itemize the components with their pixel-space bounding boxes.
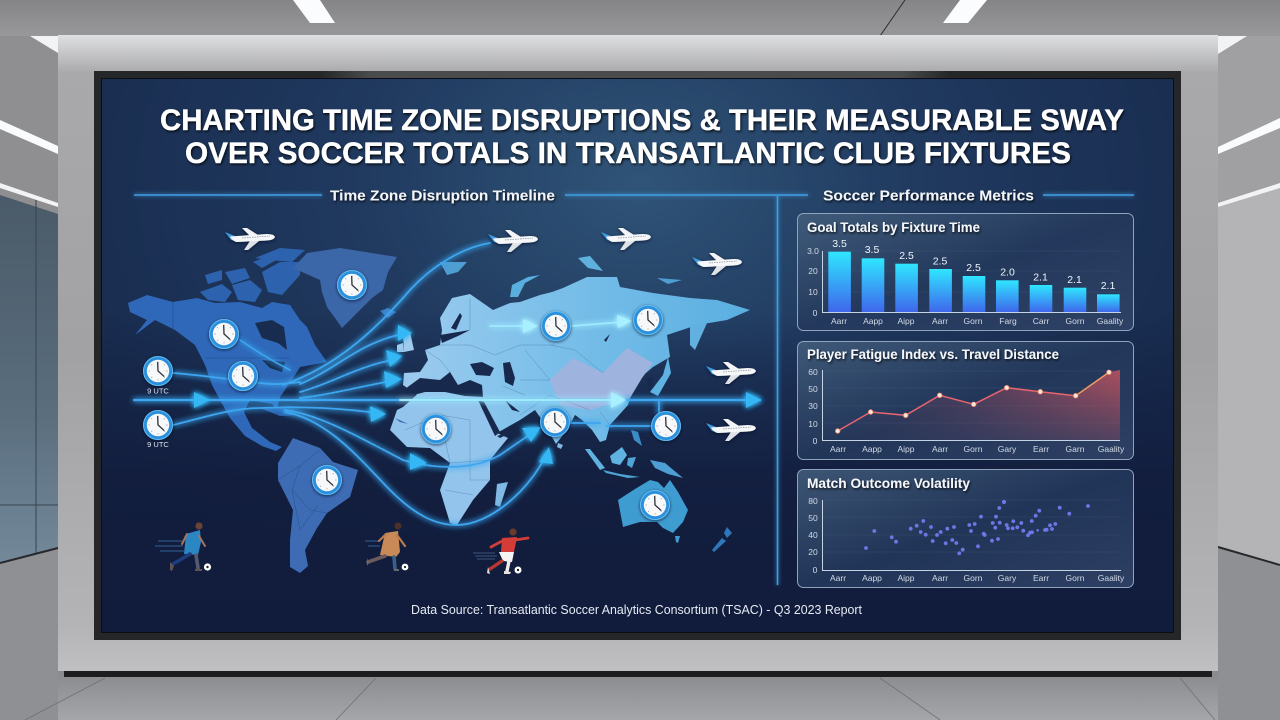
panel: goal totals bar chart xyxy=(798,214,1134,330)
continent: eurasia xyxy=(397,256,750,444)
clock labels: 9 UTC xyxy=(147,440,169,449)
data source footer: Data Source: Transatlantic Soccer Analytics Consortium (TSAC) - Q3 2023 Report xyxy=(411,602,862,617)
fatigue area xyxy=(868,370,1120,440)
fatigue axis labels: 60 xyxy=(808,367,818,377)
panel heading: Player Fatigue Index vs. Travel Distance xyxy=(807,347,1059,362)
country borders xyxy=(405,298,612,495)
fatigue axis labels: Aipp xyxy=(897,444,915,454)
bar axis labels: 20 xyxy=(808,266,818,276)
bar axis labels: Aapp xyxy=(863,316,883,326)
panel: volatility scatter chart xyxy=(798,470,1134,588)
bar values: 2.5 xyxy=(899,250,914,262)
bar axis labels: Farg xyxy=(999,316,1017,326)
bar values: 3.5 xyxy=(832,238,847,250)
scatter axis labels: 40 xyxy=(808,530,818,540)
seas and lakes xyxy=(405,313,653,438)
fatigue line end segment xyxy=(1076,372,1109,396)
bar values: 2.1 xyxy=(1101,280,1115,292)
continent: greenland xyxy=(293,248,397,328)
clock labels xyxy=(147,386,169,449)
scatter points xyxy=(864,500,1090,555)
clocks xyxy=(144,270,680,520)
continent: africa xyxy=(390,392,563,525)
bar axis labels: Aarr xyxy=(831,316,847,326)
scatter axis labels xyxy=(808,496,1125,583)
bar values: 2.1 xyxy=(1033,272,1048,284)
bar axis labels: 10 xyxy=(808,287,818,297)
fatigue axis labels: Aapp xyxy=(862,444,882,454)
arrowheads xyxy=(194,315,761,470)
fatigue axis labels: Gary xyxy=(998,444,1017,454)
title: CHARTING TIME ZONE DISRUPTIONS & THEIR MEASURABLE SWAY xyxy=(160,104,1124,137)
section header: timeline: Time Zone Disruption Timeline xyxy=(330,188,555,204)
scatter axis labels: Aipp xyxy=(897,573,915,583)
airplanes xyxy=(225,228,756,441)
scatter axis labels: Gorn xyxy=(964,573,983,583)
fatigue axis labels: Gorn xyxy=(964,444,983,454)
fatigue axis labels: Garn xyxy=(1066,444,1085,454)
continent: south america xyxy=(278,438,358,573)
fatigue line xyxy=(838,388,1076,431)
scatter axis labels: Aarr xyxy=(830,573,846,583)
world map xyxy=(128,248,750,573)
scatter axis labels: 0 xyxy=(813,565,818,575)
section header: metrics: Soccer Performance Metrics xyxy=(823,188,1034,204)
bar values: 2.1 xyxy=(1067,274,1082,286)
player: red xyxy=(473,528,528,574)
fatigue points xyxy=(835,370,1111,433)
bar axis labels: Aipp xyxy=(897,316,915,326)
bar axis labels: Gorn xyxy=(964,316,983,326)
column divider xyxy=(776,196,778,585)
panel: fatigue line chart xyxy=(798,342,1134,460)
panel heading: Goal Totals by Fixture Time xyxy=(807,220,980,235)
bars xyxy=(828,252,1120,312)
fatigue axis labels: Aarr xyxy=(830,444,846,454)
continent: north america xyxy=(128,248,327,451)
bar axis labels xyxy=(807,246,1124,326)
scatter axis labels: Aapp xyxy=(862,573,882,583)
continent: australia and islands xyxy=(395,418,732,552)
fatigue axis labels xyxy=(808,367,1125,454)
route arrows xyxy=(134,243,761,525)
bar values: 2.5 xyxy=(933,256,947,268)
scatter axis labels: 20 xyxy=(808,547,818,557)
panel heading: Match Outcome Volatility xyxy=(807,476,970,491)
scatter axis labels: Aarr xyxy=(932,573,948,583)
screen background xyxy=(102,79,1173,632)
bar values: 2.0 xyxy=(1000,266,1015,278)
player: blue xyxy=(155,522,211,571)
clock labels: 9 UTC xyxy=(147,386,169,396)
player: orange xyxy=(365,522,408,571)
bar values: 3.5 xyxy=(865,244,879,256)
fatigue axis labels: 50 xyxy=(808,384,818,394)
bar axis labels: Gorn xyxy=(1066,316,1085,326)
bar axis labels: Aarr xyxy=(932,316,948,326)
bar values: 2.5 xyxy=(966,262,981,274)
fatigue axis labels: 10 xyxy=(808,419,818,429)
bar axis labels: 0 xyxy=(813,308,818,318)
fatigue axis labels: 0 xyxy=(813,436,818,446)
title: OVER SOCCER TOTALS IN TRANSATLANTIC CLUB FIXTURES xyxy=(185,137,1071,170)
scatter axis labels: Earr xyxy=(1033,573,1049,583)
bar values xyxy=(832,238,1115,292)
bar axis labels: 3.0 xyxy=(807,246,819,256)
bar axis labels: Carr xyxy=(1033,316,1049,326)
fatigue axis labels: Gaality xyxy=(1098,444,1125,454)
scatter axis labels: Gorn xyxy=(1066,573,1085,583)
title xyxy=(160,104,1124,170)
scatter axis labels: Gaality xyxy=(1098,573,1125,583)
fatigue axis labels: Aarr xyxy=(932,444,948,454)
bar axis labels: Gaality xyxy=(1097,316,1124,326)
scatter axis labels: Gary xyxy=(998,573,1017,583)
glowing routes xyxy=(134,243,760,525)
scatter axis labels: 80 xyxy=(808,496,818,506)
fatigue axis labels: 30 xyxy=(808,401,818,411)
fatigue axis labels: Earr xyxy=(1033,444,1049,454)
scatter axis labels: 50 xyxy=(808,513,818,523)
